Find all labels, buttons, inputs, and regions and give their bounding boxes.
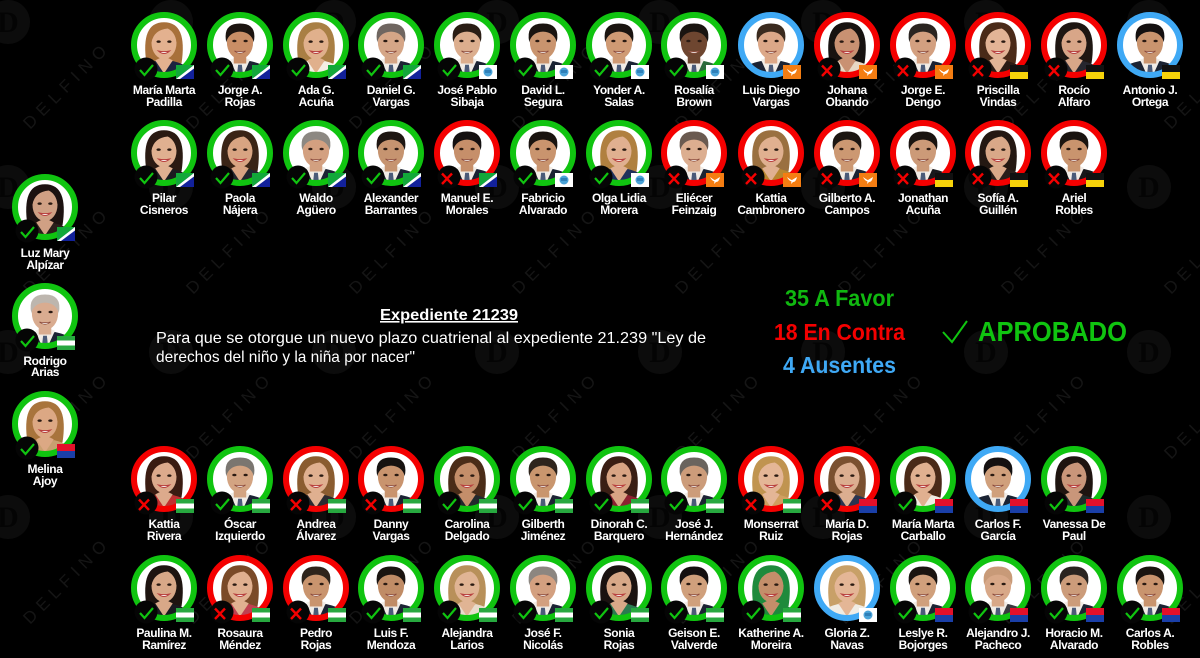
row 4 deputies (130, 558, 1184, 652)
member: Geison E. Valverde: Geison E. (668, 626, 720, 640)
member: Rosaura Méndez (206, 558, 274, 652)
member: Danny Vargas (357, 449, 425, 543)
member: Dinorah C. Barquero (585, 449, 653, 543)
member: Kattia Rivera: Rivera (147, 529, 182, 543)
member: Alexander Barrantes: Alexander (364, 191, 419, 205)
member: Luis F. Mendoza: Luis F. (374, 626, 408, 640)
member: Melina Ajoy: Ajoy (33, 474, 58, 488)
member: Rodrigo Arias: Arias (31, 365, 60, 379)
member: María Marta Padilla: María Marta (133, 83, 196, 97)
member: María Marta Carballo (889, 449, 957, 543)
member: Luis Diego Vargas: Luis Diego (742, 83, 800, 97)
member: José Pablo Sibaja: Sibaja (451, 95, 484, 109)
count: absent: 4 Ausentes (783, 352, 896, 378)
member: Ariel Robles: Ariel (1062, 191, 1086, 205)
description text: derechos del niño y la niña por nacer" (156, 349, 415, 366)
description text: Para que se otorgue un nuevo plazo cuatrienal al expediente 21.239 "Ley de (156, 330, 706, 347)
member: Jorge E. Dengo (889, 15, 957, 109)
member: Alexander Barrantes (357, 123, 425, 217)
member: Leslye R. Bojorges (889, 558, 957, 652)
member: Carolina Delgado: Carolina (445, 517, 490, 531)
member: Carlos F. García: Carlos F. (975, 517, 1021, 531)
member: Priscilla Vindas (964, 15, 1032, 109)
member: Yonder A. Salas: Yonder A. (593, 83, 645, 97)
member: Monserrat Ruiz (737, 449, 805, 543)
member: Antonio J. Ortega: Ortega (1132, 95, 1169, 109)
left column: directorate (11, 177, 79, 488)
member: Rocío Alfaro: Alfaro (1058, 95, 1090, 109)
icon: check mark (943, 321, 967, 342)
member: Ada G. Acuña (282, 15, 350, 109)
member: Gloria Z. Navas: Navas (830, 638, 864, 652)
member: Rosalía Brown (660, 15, 728, 109)
member: Alejandra Larios: Larios (450, 638, 485, 652)
member: Pilar Cisneros (130, 123, 198, 217)
result text: APROBADO (978, 316, 1127, 347)
member: Daniel G. Vargas (357, 15, 425, 109)
member: Jorge A. Rojas: Jorge A. (218, 83, 262, 97)
member: Yonder A. Salas: Salas (604, 95, 634, 109)
member: Manuel E. Morales: Manuel E. (441, 191, 493, 205)
member: Kattia Rivera: Kattia (149, 517, 180, 531)
member: Luz Mary Alpízar (11, 177, 79, 272)
member: Jorge E. Dengo: Dengo (905, 95, 941, 109)
member: Vanessa De Paul: Paul (1062, 529, 1086, 543)
member: Jorge E. Dengo: Jorge E. (901, 83, 945, 97)
member: Gilberth Jiménez (509, 449, 577, 543)
member: Eliécer Feinzaig: Feinzaig (672, 203, 716, 217)
member: Alejandro J. Pacheco: Pacheco (975, 638, 1021, 652)
member: Rosalía Brown: Brown (676, 95, 712, 109)
row 1 deputies (130, 15, 1184, 109)
member: Luis Diego Vargas: Vargas (753, 95, 790, 109)
member: Katherine A. Moreira: Moreira (751, 638, 792, 652)
member: Pedro Rojas: Rojas (301, 638, 332, 652)
member: Ariel Robles: Robles (1055, 203, 1094, 217)
member: Priscilla Vindas: Vindas (980, 95, 1017, 109)
member: Paola Nájera: Nájera (223, 203, 258, 217)
count: against: 18 En Contra (774, 319, 905, 345)
member: Gilberth Jiménez: Jiménez (521, 529, 566, 543)
member: Andrea Álvarez: Andrea (297, 517, 336, 531)
member: Monserrat Ruiz: Ruiz (759, 529, 783, 543)
member: Johana Obando: Obando (826, 95, 869, 109)
member: María Marta Padilla: Padilla (146, 95, 183, 109)
member: Olga Lidia Morera: Morera (600, 203, 639, 217)
member: David L. Segura: Segura (524, 95, 563, 109)
member: Manuel E. Morales: Morales (446, 203, 489, 217)
member: Johana Obando: Johana (827, 83, 868, 97)
member: Carlos A. Robles: Carlos A. (1126, 626, 1174, 640)
member: Alejandra Larios (433, 558, 501, 652)
member: Andrea Álvarez: Álvarez (296, 528, 336, 543)
member: Luz Mary Alpízar: Alpízar (26, 258, 64, 272)
member: Gloria Z. Navas: Gloria Z. (824, 626, 870, 640)
member: Gilberto A. Campos (813, 123, 881, 217)
member: Vanessa De Paul: Vanessa De (1043, 517, 1106, 531)
member: Carlos F. García: García (981, 529, 1016, 543)
member: Leslye R. Bojorges: Bojorges (899, 638, 948, 652)
member: José J. Hernández (660, 449, 728, 543)
member: Gilberto A. Campos: Campos (825, 203, 870, 217)
member: Luis F. Mendoza: Mendoza (367, 638, 416, 652)
member: Kattia Rivera (130, 449, 198, 543)
member: Kattia Cambronero (737, 123, 805, 217)
result: approved (943, 316, 1127, 347)
member: Danny Vargas: Danny (374, 517, 409, 531)
row 3 deputies (130, 449, 1108, 543)
member: Luis Diego Vargas (737, 15, 805, 109)
member: Priscilla Vindas: Priscilla (977, 83, 1020, 97)
member: Waldo Agüero: Agüero (296, 203, 336, 217)
member: Andrea Álvarez (282, 449, 350, 543)
member: Sonia Rojas: Rojas (604, 638, 635, 652)
member: Jorge A. Rojas (206, 15, 274, 109)
member: José F. Nicolás: Nicolás (523, 638, 564, 652)
member: Fabricio Alvarado: Alvarado (519, 203, 567, 217)
member: Geison E. Valverde: Valverde (671, 638, 718, 652)
member: José F. Nicolás: José F. (524, 626, 562, 640)
member: Dinorah C. Barquero: Dinorah C. (591, 517, 647, 531)
member: José F. Nicolás (509, 558, 577, 652)
member: Horacio M. Alvarado (1040, 558, 1108, 652)
member: Olga Lidia Morera (585, 123, 653, 217)
member: Daniel G. Vargas: Daniel G. (367, 83, 415, 97)
central description (156, 307, 706, 366)
member: José Pablo Sibaja: José Pablo (437, 83, 497, 97)
member: Paulina M. Ramírez (130, 558, 198, 652)
member: Waldo Agüero: Waldo (299, 191, 333, 205)
member: Óscar Izquierdo: Izquierdo (215, 529, 265, 543)
member: Luis F. Mendoza (357, 558, 425, 652)
member: Sofía A. Guillén: Guillén (979, 203, 1017, 217)
member: Danny Vargas: Vargas (373, 529, 410, 543)
member: Monserrat Ruiz: Monserrat (744, 517, 799, 531)
member: Pedro Rojas (282, 558, 350, 652)
member: Óscar Izquierdo (206, 449, 274, 543)
member: Eliécer Feinzaig (660, 123, 728, 217)
member: Jonathan Acuña: Jonathan (898, 191, 948, 205)
member: Kattia Cambronero: Cambronero (737, 203, 805, 217)
member: Paulina M. Ramírez: Paulina M. (136, 626, 192, 640)
member: Eliécer Feinzaig: Eliécer (676, 191, 713, 205)
member: María D. Rojas: María D. (825, 517, 869, 531)
member: María Marta Carballo: María Marta (892, 517, 955, 531)
member: Carolina Delgado: Delgado (445, 529, 489, 543)
member: David L. Segura: David L. (521, 83, 565, 97)
member: Johana Obando (813, 15, 881, 109)
member: Waldo Agüero (282, 123, 350, 217)
member: Antonio J. Ortega (1116, 15, 1184, 109)
member: Carlos F. García (964, 449, 1032, 543)
member: Ada G. Acuña: Ada G. (298, 83, 334, 97)
member: Leslye R. Bojorges: Leslye R. (898, 626, 948, 640)
member: Manuel E. Morales (433, 123, 501, 217)
member: Alexander Barrantes: Barrantes (365, 203, 418, 217)
member: Rodrigo Arias: Rodrigo (23, 354, 67, 368)
member: Paola Nájera: Paola (225, 191, 256, 205)
member: Pilar Cisneros: Pilar (152, 191, 177, 205)
member: María D. Rojas: Rojas (832, 529, 863, 543)
member: David L. Segura (509, 15, 577, 109)
member: Melina Ajoy: Melina (28, 462, 63, 476)
member: Alejandro J. Pacheco (964, 558, 1032, 652)
member: Sonia Rojas: Sonia (604, 626, 635, 640)
member: Pilar Cisneros: Cisneros (140, 203, 189, 217)
member: Rosaura Méndez: Rosaura (217, 626, 263, 640)
member: Pedro Rojas: Pedro (300, 626, 332, 640)
row 2 deputies (130, 123, 1108, 217)
member: Gloria Z. Navas (813, 558, 881, 652)
member: Jonathan Acuña: Acuña (906, 203, 941, 217)
member: Rocío Alfaro: Rocío (1058, 83, 1090, 97)
member: Jonathan Acuña (889, 123, 957, 217)
member: María Marta Padilla (130, 15, 198, 109)
member: Óscar Izquierdo: Óscar (224, 516, 257, 531)
member: Sofía A. Guillén: Sofía A. (977, 191, 1019, 205)
member: Paulina M. Ramírez: Ramírez (142, 638, 186, 652)
member: José Pablo Sibaja (433, 15, 501, 109)
member: Katherine A. Moreira: Katherine A. (738, 626, 804, 640)
member: Rosalía Brown: Rosalía (674, 83, 715, 97)
member: Sonia Rojas (585, 558, 653, 652)
member: Melina Ajoy (11, 394, 79, 488)
member: Ada G. Acuña: Acuña (299, 95, 334, 109)
member: Geison E. Valverde (660, 558, 728, 652)
member: José J. Hernández: José J. (675, 517, 713, 531)
description text (156, 330, 706, 366)
member: Paola Nájera (206, 123, 274, 217)
member: Olga Lidia Morera: Olga Lidia (592, 191, 647, 205)
vote tally (774, 285, 905, 378)
member: Sofía A. Guillén (964, 123, 1032, 217)
member: Daniel G. Vargas: Vargas (373, 95, 410, 109)
member: María D. Rojas (813, 449, 881, 543)
member: Katherine A. Moreira (737, 558, 805, 652)
member: Antonio J. Ortega: Antonio J. (1123, 83, 1177, 97)
member: Rosaura Méndez: Méndez (219, 638, 261, 652)
member: Luz Mary Alpízar: Luz Mary (21, 246, 70, 260)
member: Horacio M. Alvarado: Alvarado (1050, 638, 1098, 652)
member: Fabricio Alvarado: Fabricio (521, 191, 565, 205)
member: Yonder A. Salas (585, 15, 653, 109)
member: Gilberto A. Campos: Gilberto A. (819, 191, 875, 205)
member: Rocío Alfaro (1040, 15, 1108, 109)
member: Alejandro J. Pacheco: Alejandro J. (966, 626, 1030, 640)
member: Carolina Delgado (433, 449, 501, 543)
member: Kattia Cambronero: Kattia (756, 191, 787, 205)
heading: Expediente 21239: Expediente 21239 (380, 307, 518, 324)
member: Carlos A. Robles: Robles (1131, 638, 1170, 652)
member: Vanessa De Paul (1040, 449, 1108, 543)
member: Horacio M. Alvarado: Horacio M. (1045, 626, 1103, 640)
member: Dinorah C. Barquero: Barquero (594, 529, 644, 543)
member: Ariel Robles (1040, 123, 1108, 217)
member: María Marta Carballo: Carballo (901, 529, 945, 543)
member: Gilberth Jiménez: Gilberth (522, 517, 564, 531)
member: Fabricio Alvarado (509, 123, 577, 217)
member: Carlos A. Robles (1116, 558, 1184, 652)
member: Rodrigo Arias (11, 286, 79, 379)
count: in favour: 35 A Favor (785, 285, 894, 311)
member: Jorge A. Rojas: Rojas (225, 95, 256, 109)
member: José J. Hernández: Hernández (665, 529, 723, 543)
member: Alejandra Larios: Alejandra (441, 626, 493, 640)
